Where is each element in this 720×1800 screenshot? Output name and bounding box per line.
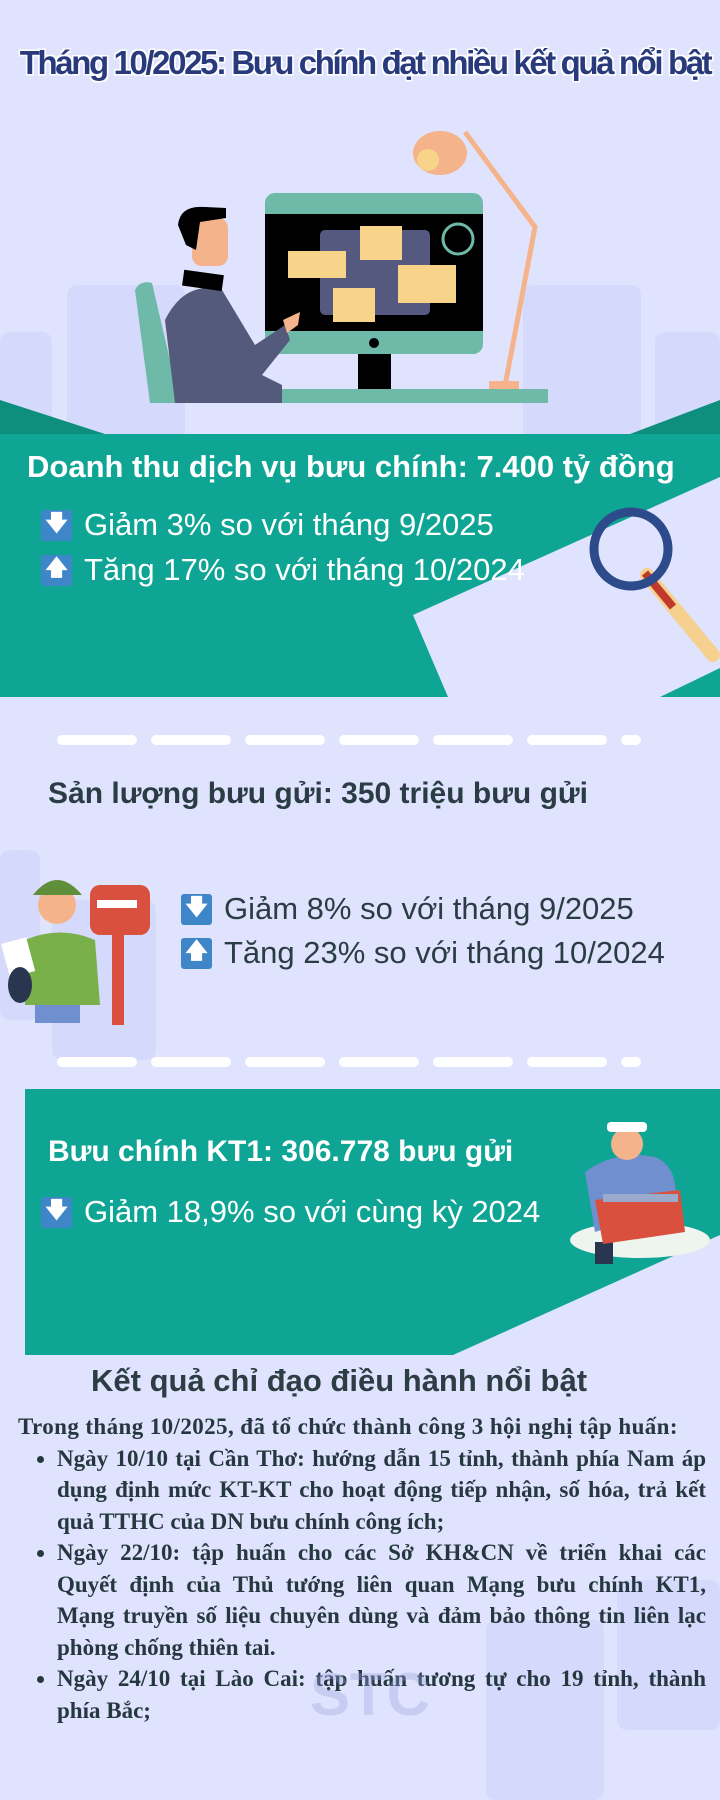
text block: results: quả TTHC của DN bưu chính công ích; (57, 1508, 444, 1534)
bullet: increase: Tăng 17% so với tháng 10/2024 (84, 552, 525, 587)
illustration: postman with mailbox (1, 880, 150, 1025)
bullet: volume decrease: 🡇 (185, 894, 208, 919)
bullet: decrease: Giảm 3% so với tháng 9/2025 (84, 507, 494, 542)
bullet: KT1 decrease: Giảm 18,9% so với cùng kỳ 2024 (84, 1194, 540, 1229)
text block: results: Mạng truyền số liệu chuyên dùng và đảm bảo thông tin liên lạc (57, 1603, 706, 1628)
bullet: decrease: 🡇 (45, 510, 68, 535)
lamp (413, 131, 535, 391)
text block: results (18, 1414, 706, 1723)
text block: results: phía Bắc; (57, 1698, 151, 1722)
person (165, 207, 300, 403)
panel: KT1 (25, 1089, 720, 1355)
icon: magnifying glass (590, 508, 720, 662)
heading: revenue: Doanh thu dịch vụ bưu chính: 7.400 tỷ đồng (27, 449, 675, 484)
text block: results: Ngày 10/10 tại Cần Thơ: hướng dẫn 15 tỉnh, thành phía Nam áp (57, 1446, 706, 1470)
heading: volume: Sản lượng bưu gửi: 350 triệu bưu gửi (48, 777, 588, 810)
text block: results: Ngày 24/10 tại Lào Cai: tập huấn tương tự cho 19 tỉnh, thành (57, 1666, 706, 1691)
heading: results: Kết quả chỉ đạo điều hành nổi bật (91, 1363, 587, 1398)
bullet: volume increase: 🡅 (185, 938, 208, 963)
bullet: KT1 decrease: 🡇 (45, 1197, 68, 1222)
panel: revenue (0, 400, 720, 697)
illustration: person at computer (135, 130, 548, 403)
bullet: increase: 🡅 (45, 555, 68, 580)
bullet: volume increase: Tăng 23% so với tháng 10/2024 (224, 935, 665, 970)
text block: results: Quyết định của Thủ tướng liên quan Mạng bưu chính KT1, (57, 1572, 706, 1596)
desk (248, 389, 548, 403)
text block: results: Ngày 22/10: tập huấn cho các Sở KH&CN về triển khai các (57, 1540, 706, 1565)
monitor (265, 193, 483, 390)
text block: results: phòng chống thiên tai. (57, 1634, 276, 1660)
dashes row 2 (57, 1057, 641, 1067)
chair (135, 282, 180, 403)
text block: results: dụng định mức KT-KT cho hoạt động tiếp nhận, số hóa, trả kết (57, 1477, 706, 1502)
illustration: postman with box (570, 1122, 710, 1264)
watermark logo: STC (310, 1661, 430, 1728)
dashes row 1 (57, 735, 641, 745)
text block: results: Trong tháng 10/2025, đã tổ chức thành công 3 hội nghị tập huấn: (18, 1414, 678, 1439)
heading: KT1: Bưu chính KT1: 306.778 bưu gửi (48, 1135, 513, 1168)
title: Tháng 10/2025: Bưu chính đạt nhiều kết quả nổi bật (20, 44, 710, 81)
bullet: volume decrease: Giảm 8% so với tháng 9/2025 (224, 891, 634, 926)
